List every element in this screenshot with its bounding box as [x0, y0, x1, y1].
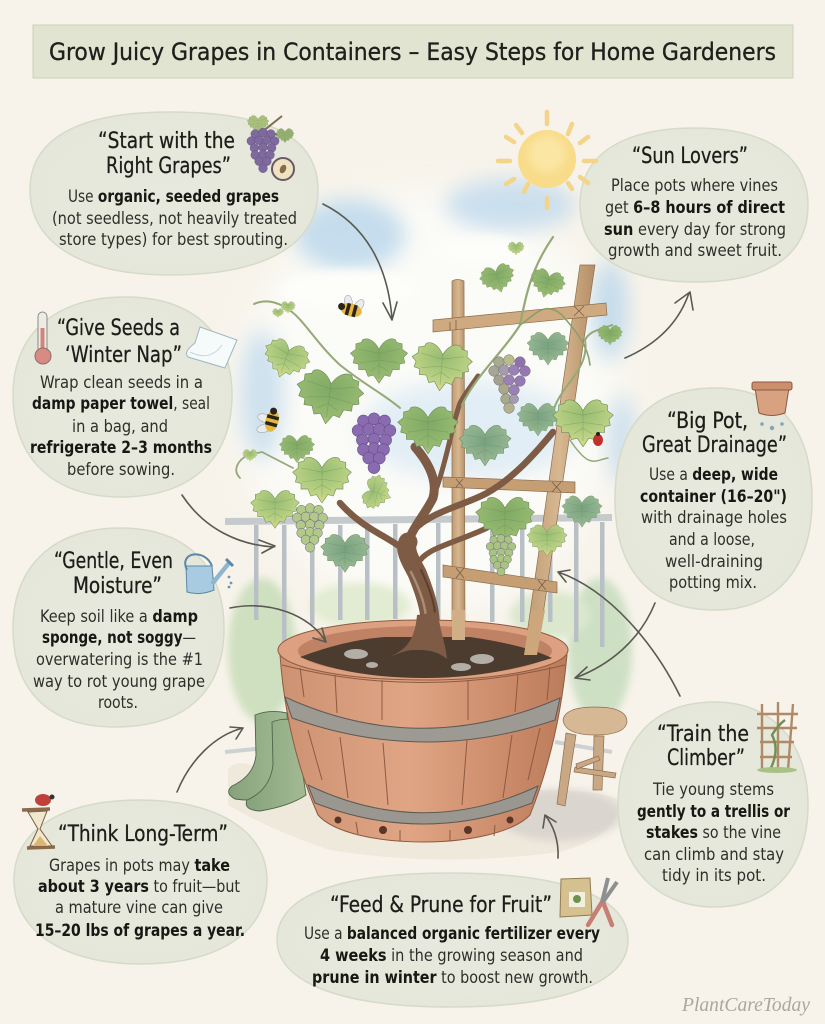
panel: big pot, great drainage	[615, 388, 812, 610]
panel: winter nap: ‘Winter Nap”	[65, 343, 182, 368]
panel: train the climber: Climber”	[667, 746, 745, 771]
grape cluster: green left	[292, 504, 328, 552]
icon: hourglass and ladybug	[22, 794, 55, 848]
icon: grapes and seed	[247, 115, 294, 180]
panel: train the climber: Tie young stems	[652, 780, 774, 799]
panel: train the climber: “Train the	[657, 722, 749, 747]
panel: winter nap: refrigerate 2–3 months	[30, 438, 212, 457]
panel: sun lovers: growth and sweet fruit.	[608, 241, 782, 260]
icon: small trellis	[757, 702, 798, 773]
rubber boots	[229, 711, 306, 811]
panel: think long-term	[14, 800, 267, 964]
icon: thermometer	[35, 312, 51, 364]
icon: fertilizer and pruners	[560, 878, 617, 925]
panel: sun lovers	[580, 128, 808, 282]
grape cluster: ripening	[489, 355, 530, 413]
arrow: sun lovers	[625, 292, 693, 358]
panel: think long-term: Grapes in pots may take	[49, 856, 230, 875]
stool	[557, 707, 627, 806]
arrow: grapes to vine	[323, 204, 397, 320]
stave lines	[282, 665, 565, 841]
panel: sun lovers: get 6–8 hours of direct	[605, 198, 785, 217]
panel: winter nap: damp paper towel, seal	[32, 394, 210, 413]
panel: start with the right grapes: Use organic, seeded grapes	[68, 187, 279, 206]
ladybug on leaf	[593, 432, 603, 446]
lower metal band	[308, 785, 538, 824]
panel: feed and prune: 4 weeks in the growing season and	[320, 946, 583, 965]
panel: train the climber: gently to a trellis or	[637, 802, 791, 821]
panel: winter nap: “Give Seeds a	[57, 316, 180, 341]
arrow: moisture	[230, 606, 326, 642]
icon: small pot with drips	[752, 382, 792, 430]
panel: feed and prune: “Feed & Prune for Fruit”	[330, 893, 552, 918]
panel: think long-term: about 3 years to fruit—but	[38, 877, 240, 896]
panel: big pot, great drainage: and a loose,	[669, 530, 755, 549]
icon: watering can	[185, 554, 233, 594]
panel: winter nap	[13, 297, 232, 497]
panel: feed and prune: prune in winter to boost new growth.	[312, 968, 593, 987]
title banner: Grow Juicy Grapes in Containers – Easy Steps for Home Gardeners	[49, 38, 776, 66]
panel: winter nap: in a bag, and	[72, 417, 168, 436]
panel: think long-term: “Think Long-Term”	[58, 822, 228, 847]
ground shadow	[228, 763, 620, 860]
arrow: long term	[177, 727, 243, 792]
sky	[240, 179, 636, 610]
title banner	[33, 25, 793, 78]
panel: gentle moisture	[13, 528, 224, 727]
arrow: winter nap	[182, 495, 275, 553]
illustration: balcony scene	[225, 179, 636, 860]
drainage holes	[334, 816, 514, 834]
panel: train the climber: can climb and stay	[644, 845, 784, 864]
upper metal band	[285, 697, 560, 742]
icon: paper towel	[187, 327, 237, 368]
panel: gentle moisture: Keep soil like a damp	[40, 607, 198, 626]
vine trunk and branches	[236, 237, 612, 650]
panel: gentle moisture: “Gentle, Even	[54, 549, 173, 574]
panel: start with the right grapes	[30, 112, 318, 275]
panel: think long-term: 15–20 lbs of grapes a year.	[35, 921, 245, 940]
panel: big pot, great drainage: with drainage holes	[641, 508, 787, 527]
panel: winter nap: Wrap clean seeds in a	[40, 373, 203, 392]
bee top	[336, 292, 367, 320]
arrow: big pot	[575, 603, 655, 680]
panel: big pot, great drainage: container (16–20")	[640, 487, 787, 506]
panel: train the climber	[618, 702, 808, 907]
panel: big pot, great drainage: Use a deep, wide	[649, 465, 778, 484]
background foliage	[228, 578, 632, 722]
trellis	[433, 265, 607, 655]
panel: gentle moisture: way to rot young grape	[33, 672, 205, 691]
panel: train the climber: stakes so the vine	[646, 823, 781, 842]
grape leaves	[242, 242, 623, 572]
panel: big pot, great drainage: well-draining	[665, 552, 763, 571]
arrows	[177, 204, 693, 858]
panel: start with the right grapes: “Start with the	[98, 129, 235, 154]
bee lower	[253, 404, 282, 438]
panel: big pot, great drainage: potting mix.	[669, 573, 757, 592]
panel: sun lovers: “Sun Lovers”	[632, 144, 748, 169]
arrow: train climber	[558, 570, 680, 696]
panel: gentle moisture: roots.	[98, 693, 138, 712]
watermark: PlantCareToday	[681, 994, 810, 1016]
panel: big pot, great drainage: “Big Pot,	[667, 409, 748, 434]
panel: sun lovers: sun every day for strong	[604, 220, 786, 239]
panel: start with the right grapes: Right Grapes”	[106, 154, 231, 179]
panel: think long-term: a mature vine can give	[55, 898, 223, 917]
railing	[225, 514, 612, 685]
panel: feed and prune: Use a balanced organic fertilizer every	[304, 924, 600, 943]
trellis and trunk base over soil	[389, 610, 545, 659]
soil	[300, 637, 552, 678]
panel: feed and prune	[277, 873, 628, 1007]
panel: big pot, great drainage: Great Drainage”	[642, 433, 787, 458]
grape cluster: green right	[486, 535, 516, 576]
panel: start with the right grapes: store types) for best sprouting.	[59, 230, 288, 249]
panel: sun lovers: Place pots where vines	[611, 176, 778, 195]
panel: winter nap: before sowing.	[67, 460, 175, 479]
grape cluster: purple	[352, 413, 396, 474]
panel: gentle moisture: sponge, not soggy—	[42, 628, 196, 647]
panel: gentle moisture: overwatering is the #1	[36, 650, 203, 669]
panel: gentle moisture: Moisture”	[73, 574, 162, 599]
barrel planter	[278, 620, 568, 842]
panel: start with the right grapes: (not seedless, not heavily treated	[52, 209, 297, 228]
arrow: feed prune	[543, 815, 558, 858]
icon: sun	[498, 112, 596, 208]
panel: train the climber: tidy in its pot.	[662, 866, 766, 885]
